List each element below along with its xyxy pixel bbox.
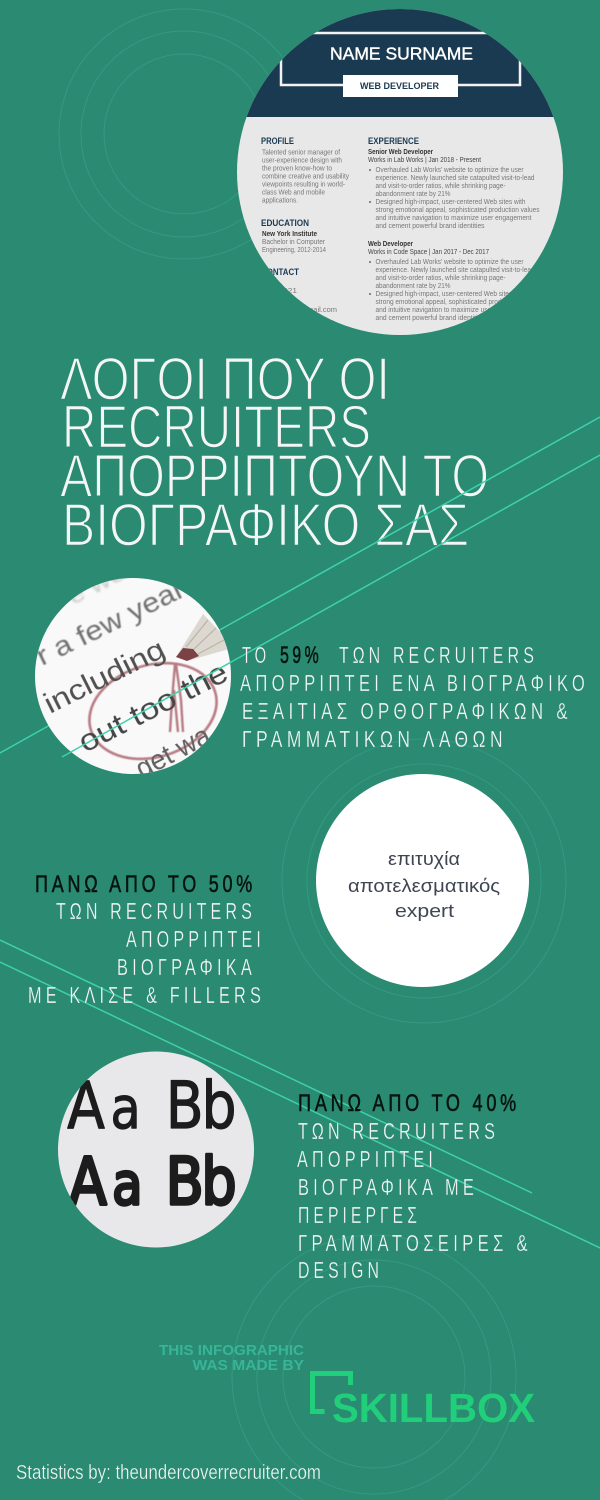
text block: 59% statistic xyxy=(240,642,589,752)
panel: resume image circle: Web Developer xyxy=(368,241,413,248)
title: ΒΙΟΓΡΑΦΙΚΟ ΣΑΣ xyxy=(62,492,469,558)
text block: 50% statistic: ΒΙΟΓΡΑΦΙΚΑ xyxy=(117,954,256,980)
title xyxy=(60,346,489,558)
text block: 40% statistic xyxy=(297,1090,532,1283)
panel: typefaces circle: b xyxy=(201,1069,237,1144)
panel: proofreading photo circle: out too the xyxy=(72,654,233,759)
panel: resume image circle: yourname@gmail.com xyxy=(262,307,337,314)
panel: typefaces circle xyxy=(58,1052,254,1248)
panel: resume image circle: experience. Newly launched site catapulted visit-to-lead xyxy=(376,175,535,182)
panel: resume image circle: and intuitive navigation to maximize user engagement xyxy=(376,307,532,314)
panel: proofreading photo circle: r a few year xyxy=(31,573,189,671)
text block: 40% statistic: ΠΑΝΩ ΑΠΟ ΤΟ 40% xyxy=(298,1090,520,1117)
source note: Statistics by: theundercoverrecruiter.com xyxy=(16,1462,321,1484)
panel: resume image circle: viewpoints resulting in world- xyxy=(262,182,346,188)
panel: resume image circle: Overhauled Lab Works' website to optimize the user xyxy=(376,167,524,174)
text block: 50% statistic: ΜΕ ΚΛΙΣΕ & FILLERS xyxy=(28,982,265,1008)
panel: buzzwords white circle: expert xyxy=(395,900,454,921)
panel: resume image circle: class Web and mobile xyxy=(262,190,325,196)
credit: made by: WAS MADE BY xyxy=(192,1357,304,1374)
panel: resume image circle: WEB DEVELOPER xyxy=(360,81,439,92)
text block: 50% statistic: ΤΩΝ RECRUITERS xyxy=(56,898,256,924)
text block: 40% statistic: ΒΙΟΓΡΑΦΙΚΑ ΜΕ xyxy=(298,1174,478,1200)
text block: 50% statistic xyxy=(28,871,265,1008)
panel: resume image circle xyxy=(237,9,563,335)
panel: resume image circle: user-experience design with xyxy=(262,158,342,164)
panel: resume image circle: and cement powerful brand identities xyxy=(376,223,485,230)
panel: resume image circle: applications. xyxy=(262,198,298,204)
panel: resume image circle: experience. Newly launched site catapulted visit-to-lead xyxy=(376,267,535,274)
text block: 59% statistic: ΤΟ xyxy=(242,642,270,668)
panel: resume image circle: and visit-to-order ratios, while shrinking page- xyxy=(376,275,506,282)
panel: resume image circle: abandonment rate by 21% xyxy=(376,191,450,198)
title: ΛΟΓΟΙ ΠΟΥ ΟΙ xyxy=(60,346,390,412)
text block: 40% statistic: DESIGN xyxy=(298,1257,383,1283)
panel: typefaces circle: b xyxy=(201,1145,237,1220)
panel: resume image circle: NAME SURNAME xyxy=(330,44,473,64)
panel: proofreading photo circle: e we xyxy=(63,559,129,610)
panel: resume image circle: and cement powerful brand identities xyxy=(376,315,485,322)
panel: resume image circle: combine creative and usability xyxy=(262,174,349,180)
panel: resume image circle: 555-2021 xyxy=(262,288,297,295)
panel: buzzwords white circle xyxy=(316,774,529,987)
panel: typefaces circle: A xyxy=(69,1145,107,1220)
text block: 40% statistic: ΤΩΝ RECRUITERS xyxy=(298,1118,499,1144)
text block: 50% statistic: ΠΑΝΩ ΑΠΟ ΤΟ 50% xyxy=(35,871,256,898)
panel: resume image circle: and visit-to-order ratios, while shrinking page- xyxy=(376,183,506,190)
panel: resume image circle: CONTACT xyxy=(261,267,299,278)
panel: resume image circle: Engineering, 2012-2014 xyxy=(262,247,326,254)
panel: proofreading photo circle xyxy=(35,578,231,774)
panel: proofreading photo circle: including xyxy=(39,633,170,720)
panel: resume image circle: and intuitive navigation to maximize user engagement xyxy=(376,215,532,222)
panel: resume image circle: New York Institute xyxy=(262,231,317,238)
panel: proofreading photo circle: get wa xyxy=(130,719,217,785)
panel: resume image circle: strong emotional appeal, sophisticated production values xyxy=(376,207,540,214)
credit: made by xyxy=(159,1342,304,1374)
panel: buzzwords white circle: επιτυχία xyxy=(388,848,460,869)
credit: made by: THIS INFOGRAPHIC xyxy=(159,1342,304,1359)
panel: resume image circle: EXPERIENCE xyxy=(368,136,419,147)
panel: typefaces circle: a xyxy=(111,1074,141,1142)
panel: typefaces circle: B xyxy=(166,1069,204,1144)
panel: resume image circle: Works in Code Space | Jan 2017 - Dec 2017 xyxy=(368,249,489,256)
text block: 50% statistic: ΑΠΟΡΡΙΠΤΕΙ xyxy=(126,926,265,952)
panel: resume image circle: abandonment rate by 21% xyxy=(376,283,450,290)
panel: resume image circle: Designed high-impact, user-centered Web sites with xyxy=(376,291,526,298)
panel: resume image circle: Works in Lab Works | Jan 2018 - Present xyxy=(368,157,481,164)
panel: typefaces circle: A xyxy=(67,1069,105,1144)
text block: 40% statistic: ΑΠΟΡΡΙΠΤΕΙ xyxy=(297,1146,437,1172)
panel: resume image circle: PROFILE xyxy=(261,136,294,147)
title: RECRUITERS xyxy=(62,394,371,460)
panel: resume image circle: strong emotional appeal, sophisticated production values xyxy=(376,299,540,306)
panel: resume image circle: Senior Web Developer xyxy=(368,149,433,156)
logo: skillbox: SKILLBOX xyxy=(332,1385,535,1431)
panel: resume image circle: the proven know-how to xyxy=(262,166,332,172)
panel: resume image circle: EDUCATION xyxy=(261,218,309,229)
panel: resume image circle: Overhauled Lab Works' website to optimize the user xyxy=(376,259,524,266)
text block: 59% statistic: 59% xyxy=(280,642,322,669)
panel: resume image circle: Talented senior manager of xyxy=(262,150,340,156)
panel: resume image circle: Designed high-impact, user-centered Web sites with xyxy=(376,199,526,206)
panel: typefaces circle: B xyxy=(166,1145,204,1220)
text block: 59% statistic: ΓΡΑΜΜΑΤΙΚΩΝ ΛΑΘΩΝ xyxy=(242,726,507,752)
panel: resume image circle: Bachelor in Computer xyxy=(262,239,326,246)
panel: typefaces circle: a xyxy=(112,1150,142,1218)
text block: 40% statistic: ΠΕΡΙΕΡΓΕΣ xyxy=(298,1202,421,1228)
panel: buzzwords white circle: αποτελεσματικός xyxy=(348,875,500,896)
title: ΑΠΟΡΡΙΠΤΟΥΝ ΤΟ xyxy=(60,442,489,510)
